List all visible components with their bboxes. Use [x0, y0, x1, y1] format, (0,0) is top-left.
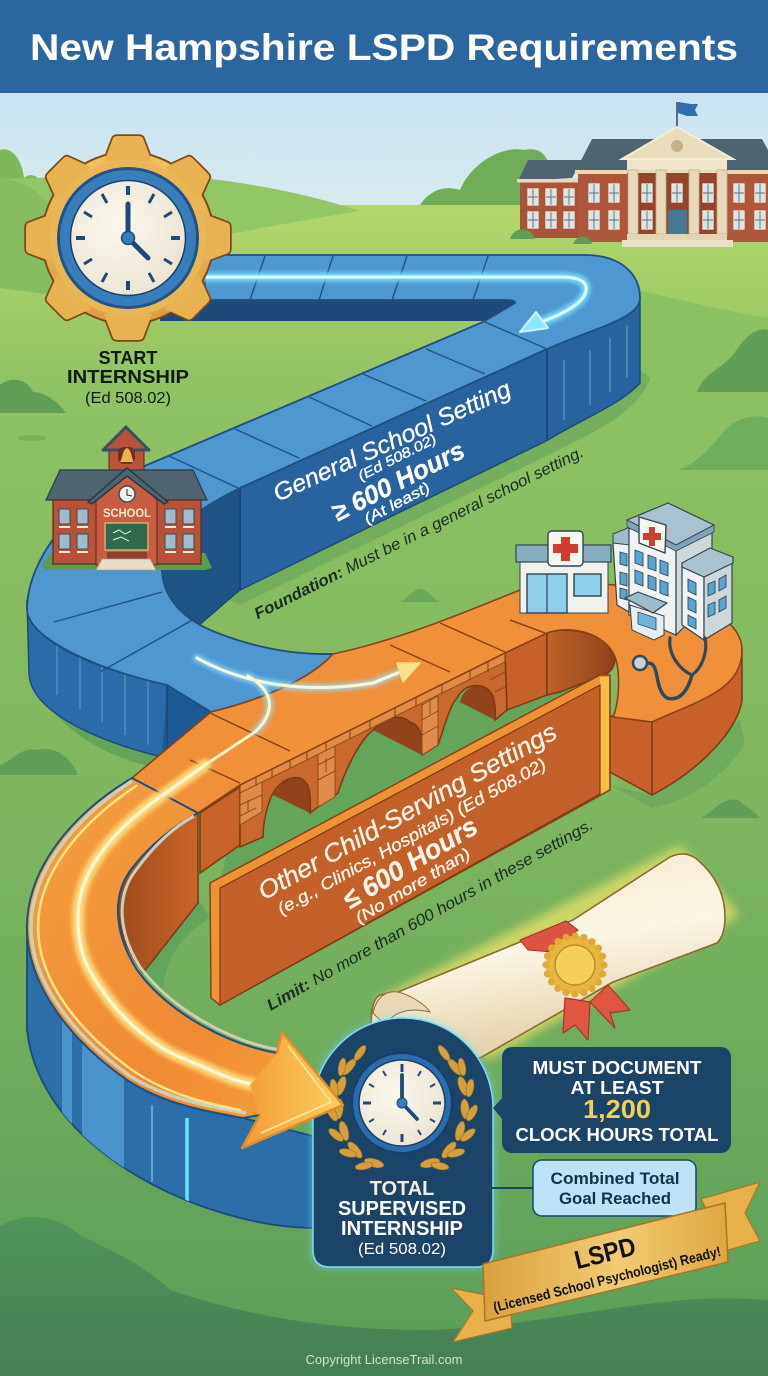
label: start internship: START — [99, 348, 157, 368]
callout: must document: AT LEAST — [570, 1077, 664, 1098]
text: foundation note: Foundation: Must be in a general school setting. — [252, 444, 587, 623]
title bar: New Hampshire LSPD Requirements — [30, 27, 738, 68]
icon: school — [42, 427, 212, 570]
glow arrow: upper road — [205, 277, 586, 332]
big orange sweep arrow — [27, 765, 343, 1148]
label: start internship: (Ed 508.02) — [85, 390, 171, 407]
icon: school: SCHOOL — [103, 508, 151, 520]
road: orange top surface — [132, 584, 742, 813]
label: start internship — [67, 348, 189, 407]
icon: gear clock — [26, 136, 230, 340]
glow arrow: blue to orange transition — [197, 658, 420, 765]
badge: total supervised internship: (Ed 508.02) — [358, 1241, 446, 1258]
ground shadows — [26, 370, 745, 1242]
text: limit note: Limit: No more than 600 hours in these settings. — [264, 816, 596, 1014]
road: tile lines — [132, 620, 545, 813]
title bar — [0, 0, 768, 93]
label: start internship: INTERNSHIP — [67, 367, 189, 387]
road: blue top surface — [27, 255, 640, 712]
icon: stethoscope — [633, 638, 706, 699]
road: bridge wall with arches — [200, 630, 615, 890]
badge: total supervised internship: SUPERVISED — [338, 1198, 466, 1220]
road: big blue wall under sweep — [27, 930, 320, 1228]
road: right orange wall — [610, 650, 742, 795]
callout: must document: 1,200 — [583, 1094, 651, 1124]
road: blue wall, lower left — [27, 600, 211, 757]
road: blue wall, upper right — [240, 298, 640, 590]
badge: total supervised internship: INTERNSHIP — [341, 1218, 463, 1240]
badge: total supervised internship — [242, 1018, 493, 1267]
text: general school setting: General School Setting — [269, 375, 516, 507]
text: other settings: (No more than) — [353, 845, 474, 927]
ribbon: LSPD ready: LSPD — [571, 1231, 639, 1275]
bottom hills — [0, 1217, 768, 1376]
text: general school setting: (At least) — [361, 479, 433, 528]
icon: clinic — [516, 531, 611, 613]
road: inner dark wall — [160, 300, 515, 628]
text: general school setting: ≥ 600 Hours — [327, 435, 469, 527]
callout: combined total — [533, 1160, 696, 1216]
connector line — [492, 1187, 533, 1189]
ribbon: LSPD ready — [451, 1182, 760, 1342]
callout: must document: CLOCK HOURS TOTAL — [516, 1124, 718, 1145]
text: other settings: ≤ 600 Hours — [337, 811, 483, 915]
ribbon: LSPD ready: (Licensed School Psychologist) Ready! — [492, 1243, 722, 1315]
badge: total supervised internship: TOTAL — [370, 1178, 434, 1200]
road: inner sweep wall — [118, 813, 198, 973]
text: other settings: (e.g., Clinics, Hospitals) (Ed 508.02) — [274, 755, 549, 919]
capitol building — [510, 102, 768, 247]
callout: combined total: Combined Total — [550, 1170, 680, 1188]
text: other settings: Other Child-Serving Settings — [253, 718, 562, 906]
text: general school setting: (Ed 508.02) — [355, 430, 439, 484]
icon: hospital — [613, 503, 733, 640]
callout: combined total: Goal Reached — [559, 1190, 671, 1208]
callout: must document — [493, 1047, 731, 1153]
copyright: Copyright LicenseTrail.com — [305, 1352, 463, 1367]
callout: must document: MUST DOCUMENT — [532, 1057, 702, 1078]
orange panel — [210, 675, 610, 1005]
icon: diploma scroll — [371, 845, 740, 1060]
